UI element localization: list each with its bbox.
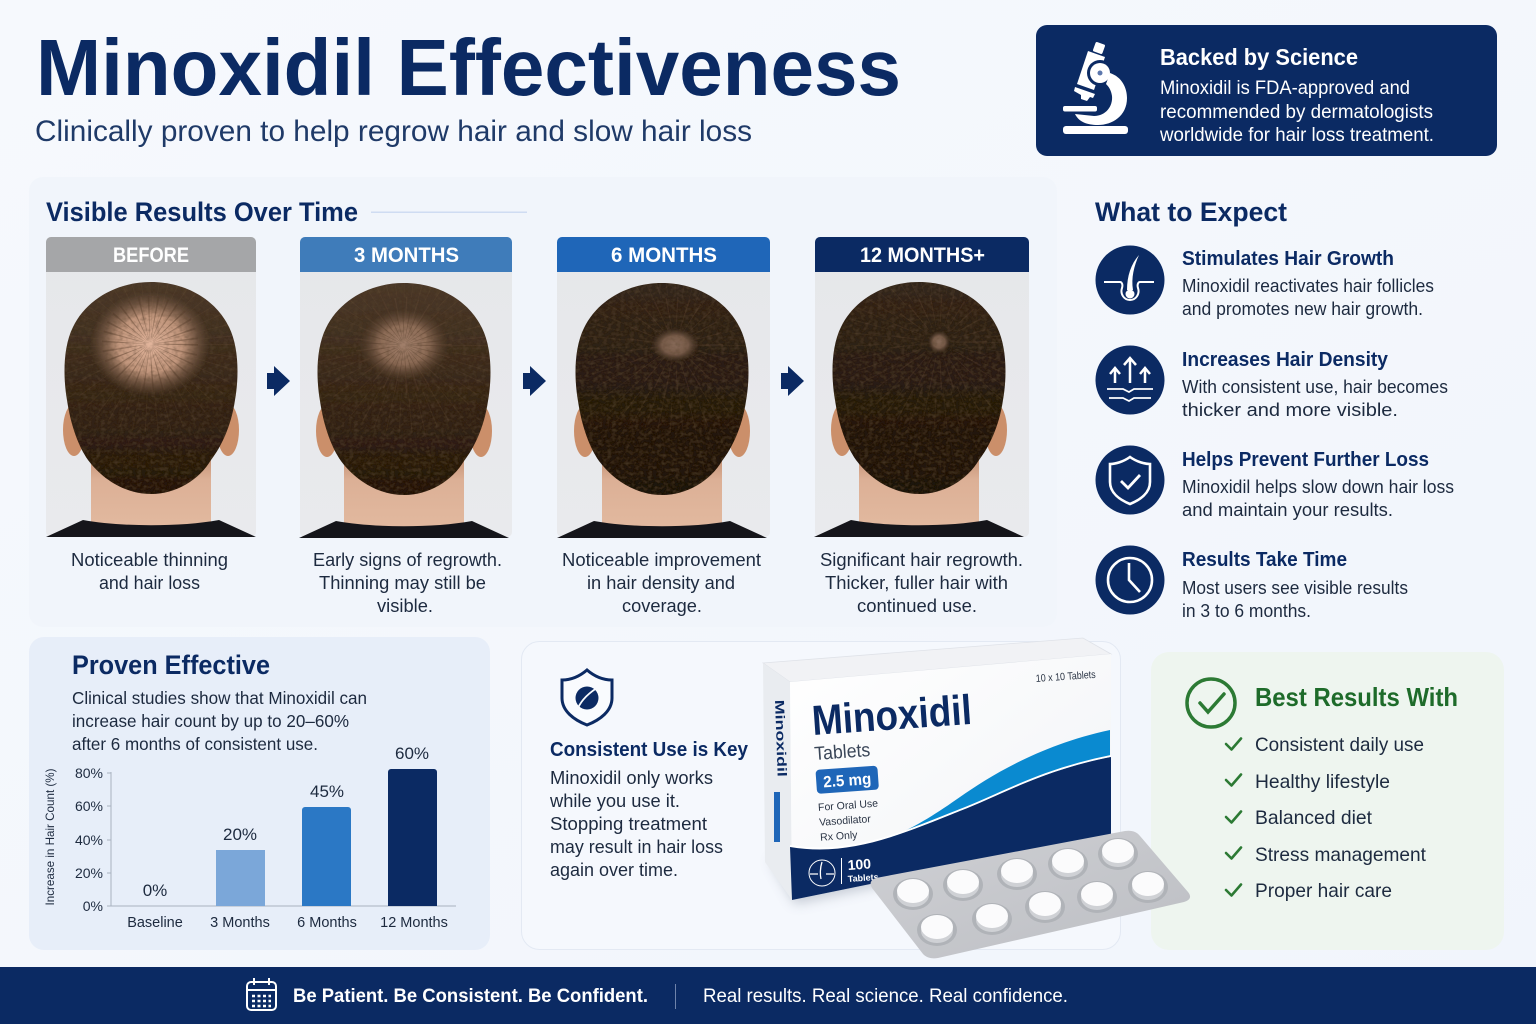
text block <box>549 767 723 880</box>
icon: shield <box>562 670 612 725</box>
checklist: Healthy lifestyle <box>1255 771 1390 793</box>
icon: check circle <box>1187 679 1235 727</box>
item: increases hair density: Increases Hair Density <box>1182 348 1389 371</box>
blister pack <box>871 831 1190 958</box>
checklist: Balanced diet <box>1255 807 1373 829</box>
heading: Best Results With <box>1255 682 1458 712</box>
card: before: BEFORE <box>113 244 189 267</box>
photo: head before <box>46 282 256 537</box>
text block: worldwide for hair loss treatment. <box>1159 125 1434 146</box>
product box: 10 x 10 Tablets <box>1035 669 1096 685</box>
item: stimulates hair growth: Minoxidil reactivates hair follicles <box>1182 276 1434 296</box>
card: 6 months: coverage. <box>622 595 702 616</box>
item: helps prevent further loss: and maintain your results. <box>1182 500 1393 520</box>
card: 6 months <box>557 237 783 616</box>
bar chart: 80% <box>75 765 103 781</box>
bar chart: 6 Months <box>297 915 357 931</box>
bar chart: 0% <box>83 898 103 914</box>
product box: 2.5 mg <box>823 771 872 791</box>
bar chart: 3 Months <box>210 915 270 931</box>
panel: consistent use <box>522 638 1190 958</box>
bar chart: 12 Months <box>380 915 448 931</box>
text block: Stopping treatment <box>550 813 707 834</box>
heading: Backed by Science <box>1160 44 1358 70</box>
item: results take time: Results Take Time <box>1182 548 1347 571</box>
item: results take time <box>1096 546 1408 621</box>
card: 12 months: 12 MONTHS+ <box>860 244 985 267</box>
product box: Minoxidil <box>810 686 973 744</box>
item: results take time: in 3 to 6 months. <box>1182 601 1311 621</box>
bar chart: 20% <box>223 825 257 844</box>
arrow <box>523 366 546 396</box>
item: helps prevent further loss: Helps Prevent Further Loss <box>1182 448 1429 471</box>
card: 12 months: continued use. <box>857 595 977 616</box>
checklist: Stress management <box>1255 844 1427 866</box>
icon: microscope <box>1063 42 1128 134</box>
card: 6 months: Noticeable improvement <box>562 549 761 570</box>
card: 3 months: Thinning may still be <box>319 572 486 593</box>
text block: recommended by dermatologists <box>1160 102 1433 123</box>
panel: what to expect <box>1095 197 1454 621</box>
checklist <box>1226 734 1427 902</box>
product box: Vasodilator <box>819 813 872 829</box>
text block: Minoxidil only works <box>550 767 713 788</box>
item: results take time: Most users see visible results <box>1182 578 1408 598</box>
photo: head 3 months <box>299 283 509 538</box>
item: increases hair density: thicker and more visible. <box>1182 400 1398 420</box>
checklist: Proper hair care <box>1255 880 1392 902</box>
product box <box>763 638 1111 904</box>
card: 3 months: visible. <box>377 595 433 616</box>
title: Minoxidil Effectiveness <box>36 23 901 112</box>
text block: may result in hair loss <box>550 836 723 857</box>
card: 12 months <box>814 234 1047 616</box>
item: stimulates hair growth <box>1096 246 1434 319</box>
arrow <box>267 366 290 396</box>
footer banner: Be Patient. Be Consistent. Be Confident. <box>293 986 648 1007</box>
product box: Minoxidil <box>772 700 790 777</box>
heading: What to Expect <box>1095 197 1287 227</box>
bar chart <box>43 744 456 931</box>
text block: after 6 months of consistent use. <box>72 734 318 754</box>
text block <box>1159 78 1434 146</box>
bar chart: 40% <box>75 832 103 848</box>
text block: Minoxidil is FDA-approved and <box>1160 78 1410 99</box>
photo: head 6 months <box>557 283 767 538</box>
card: before: Noticeable thinning <box>71 549 228 570</box>
product box: 100 <box>847 855 872 873</box>
item: helps prevent further loss <box>1096 446 1454 520</box>
panel: visible results over time <box>46 202 1029 616</box>
bar chart: Baseline <box>127 915 183 931</box>
text block: increase hair count by up to 20–60% <box>72 711 349 731</box>
card: 12 months: Thicker, fuller hair with <box>825 572 1008 593</box>
card: 12 months: Significant hair regrowth. <box>820 549 1023 570</box>
bar chart: Increase in Hair Count (%) <box>43 768 57 906</box>
bar chart: 0% <box>143 881 167 900</box>
heading: Visible Results Over Time <box>46 197 358 227</box>
subtitle: Clinically proven to help regrow hair and slow hair loss <box>35 115 752 148</box>
panel: proven effective <box>29 637 490 950</box>
item: stimulates hair growth: and promotes new hair growth. <box>1182 299 1423 319</box>
bar chart: 45% <box>310 782 344 801</box>
text block <box>72 688 367 754</box>
text block: while you use it. <box>549 790 680 811</box>
card: before <box>42 236 258 593</box>
product box: Rx Only <box>820 829 859 844</box>
footer banner <box>0 967 1536 1024</box>
icon: calendar <box>247 978 276 1010</box>
item: increases hair density <box>1096 346 1448 420</box>
card: before: and hair loss <box>99 572 200 593</box>
product box: For Oral Use <box>818 798 879 814</box>
card: 3 months: Early signs of regrowth. <box>313 549 502 570</box>
product box: Tablets <box>814 740 871 765</box>
bar chart: 60% <box>75 798 103 814</box>
item: helps prevent further loss: Minoxidil helps slow down hair loss <box>1182 477 1454 497</box>
card: 6 months: in hair density and <box>587 572 735 593</box>
bar chart: 20% <box>75 865 103 881</box>
panel: backed by science <box>1036 25 1497 156</box>
heading: Consistent Use is Key <box>550 739 749 761</box>
product box: Tablets <box>847 872 879 884</box>
heading: Proven Effective <box>72 650 270 680</box>
panel: best results with <box>1151 652 1504 950</box>
card: 3 months: 3 MONTHS <box>354 244 459 267</box>
text block: Clinical studies show that Minoxidil can <box>72 688 367 708</box>
card: 3 months <box>296 237 512 616</box>
item: stimulates hair growth: Stimulates Hair Growth <box>1182 247 1394 270</box>
text block: again over time. <box>550 859 678 880</box>
arrow <box>781 366 804 396</box>
photo: head 12 months <box>814 282 1024 537</box>
bar chart: 60% <box>395 744 429 763</box>
card: 6 months: 6 MONTHS <box>611 244 717 267</box>
checklist: Consistent daily use <box>1255 734 1424 756</box>
footer banner: Real results. Real science. Real confidence. <box>703 986 1068 1007</box>
item: increases hair density: With consistent use, hair becomes <box>1182 377 1448 397</box>
